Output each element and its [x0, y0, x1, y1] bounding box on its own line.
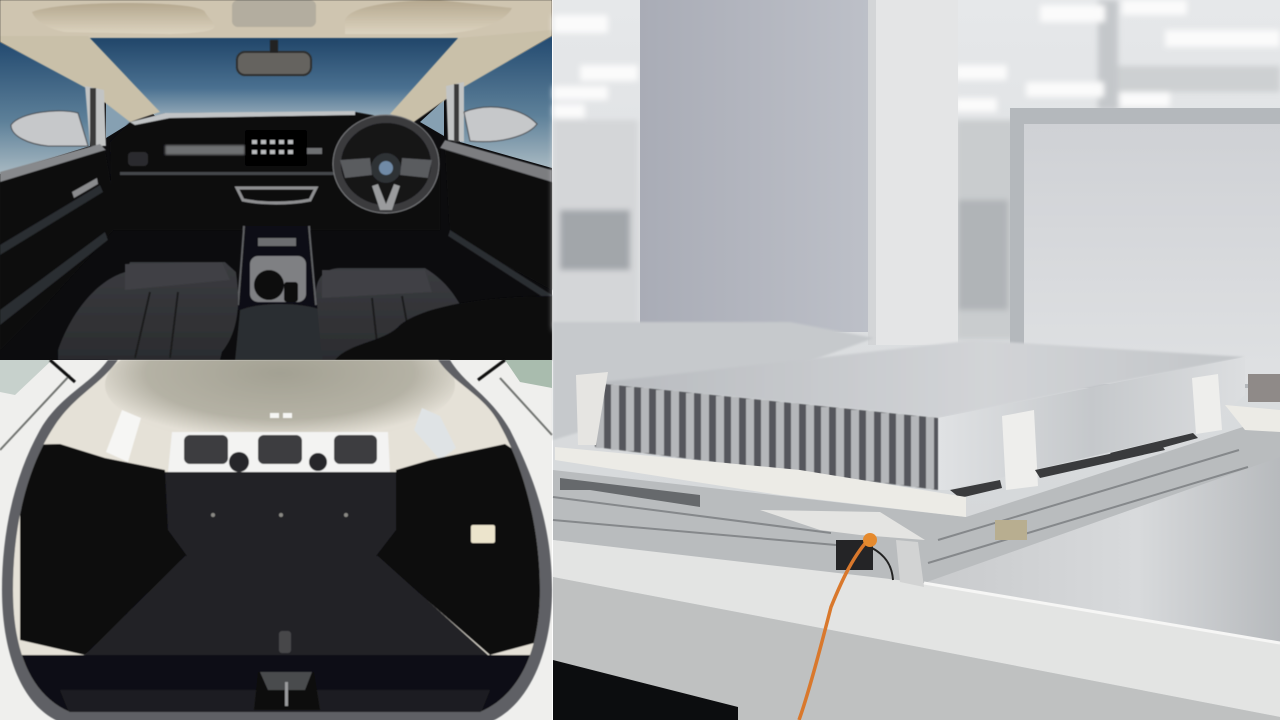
- dark gaps under tray left: [560, 478, 700, 507]
- door edge highlight left: [0, 144, 106, 182]
- black wire: [872, 548, 893, 580]
- right side window: [460, 36, 552, 168]
- boot opening: [12, 359, 540, 712]
- frame joint: [995, 520, 1027, 540]
- rail base: [553, 415, 1280, 585]
- steering wheel: [337, 119, 435, 209]
- frame rail lines: [553, 450, 1248, 563]
- top left car window: [0, 360, 52, 395]
- dash gloss band: [165, 145, 245, 155]
- dark floor: [553, 660, 738, 720]
- door edge highlight right: [440, 140, 552, 182]
- factory background: [553, 0, 1280, 340]
- roof lining: [0, 0, 552, 38]
- seat back studs: [211, 513, 215, 517]
- dark slots under pack: [1035, 443, 1165, 478]
- sensor box: [836, 540, 873, 570]
- right wall: [376, 444, 545, 655]
- ceiling lights: [553, 0, 1280, 118]
- headliner: [105, 360, 455, 432]
- white plate: [760, 510, 925, 540]
- roof lights: [270, 413, 279, 418]
- rear view mirror: [237, 52, 311, 75]
- right wing mirror: [464, 107, 537, 142]
- right pillar: [390, 30, 552, 122]
- left wing mirror: [11, 111, 88, 146]
- boot rim: [2, 360, 552, 720]
- left door: [0, 150, 118, 350]
- left seat: [58, 262, 238, 360]
- armrest: [235, 304, 322, 360]
- white front tray rail: [555, 447, 966, 517]
- white clips: [1002, 410, 1038, 490]
- battery cells: [595, 383, 938, 490]
- right screen panel: [1010, 108, 1280, 388]
- boot lip: [21, 654, 530, 712]
- dash top: [110, 112, 440, 230]
- foreground dark shape: [335, 296, 552, 360]
- left side window: [106, 410, 141, 462]
- left wall: [20, 444, 190, 655]
- rear battery tray: [553, 322, 874, 440]
- white pillar: [868, 0, 958, 345]
- boot light: [471, 525, 495, 543]
- trim line: [120, 172, 335, 175]
- wall column: [640, 0, 870, 332]
- right connector clip: [1225, 405, 1280, 432]
- floor hook: [279, 631, 291, 653]
- glovebox vent: [128, 152, 148, 166]
- orange cable: [799, 540, 868, 720]
- table front face: [553, 577, 1280, 720]
- orange cable tie: [863, 533, 877, 547]
- table chamfer: [553, 540, 1280, 717]
- overhead console: [232, 0, 316, 27]
- panel: battery pack photo: [553, 0, 1280, 720]
- centre console: [236, 226, 318, 310]
- boot latch plate: [254, 672, 320, 710]
- right seat: [316, 268, 462, 360]
- right side window: [414, 408, 456, 460]
- panel: car boot photo: [0, 325, 552, 720]
- small right quarter glass: [420, 100, 444, 136]
- rear seat backs: [165, 472, 396, 558]
- silver air vent: [237, 188, 316, 203]
- windscreen: [85, 36, 462, 116]
- headrests: [184, 435, 228, 464]
- table top glass: [924, 457, 1280, 643]
- right door: [445, 150, 552, 290]
- panel: car interior photo: [0, 0, 552, 360]
- battery module top: [595, 340, 1245, 418]
- door handle: [72, 178, 98, 198]
- rear window: [168, 432, 390, 472]
- left side window: [0, 42, 90, 174]
- boot floor: [85, 556, 488, 655]
- infotainment screen: [245, 130, 307, 166]
- dark connector on right: [1248, 374, 1280, 402]
- left pillar: [0, 36, 160, 122]
- small left quarter glass: [106, 102, 132, 138]
- bracket: [896, 540, 924, 587]
- battery module side: [938, 357, 1245, 490]
- top right car window: [505, 360, 552, 388]
